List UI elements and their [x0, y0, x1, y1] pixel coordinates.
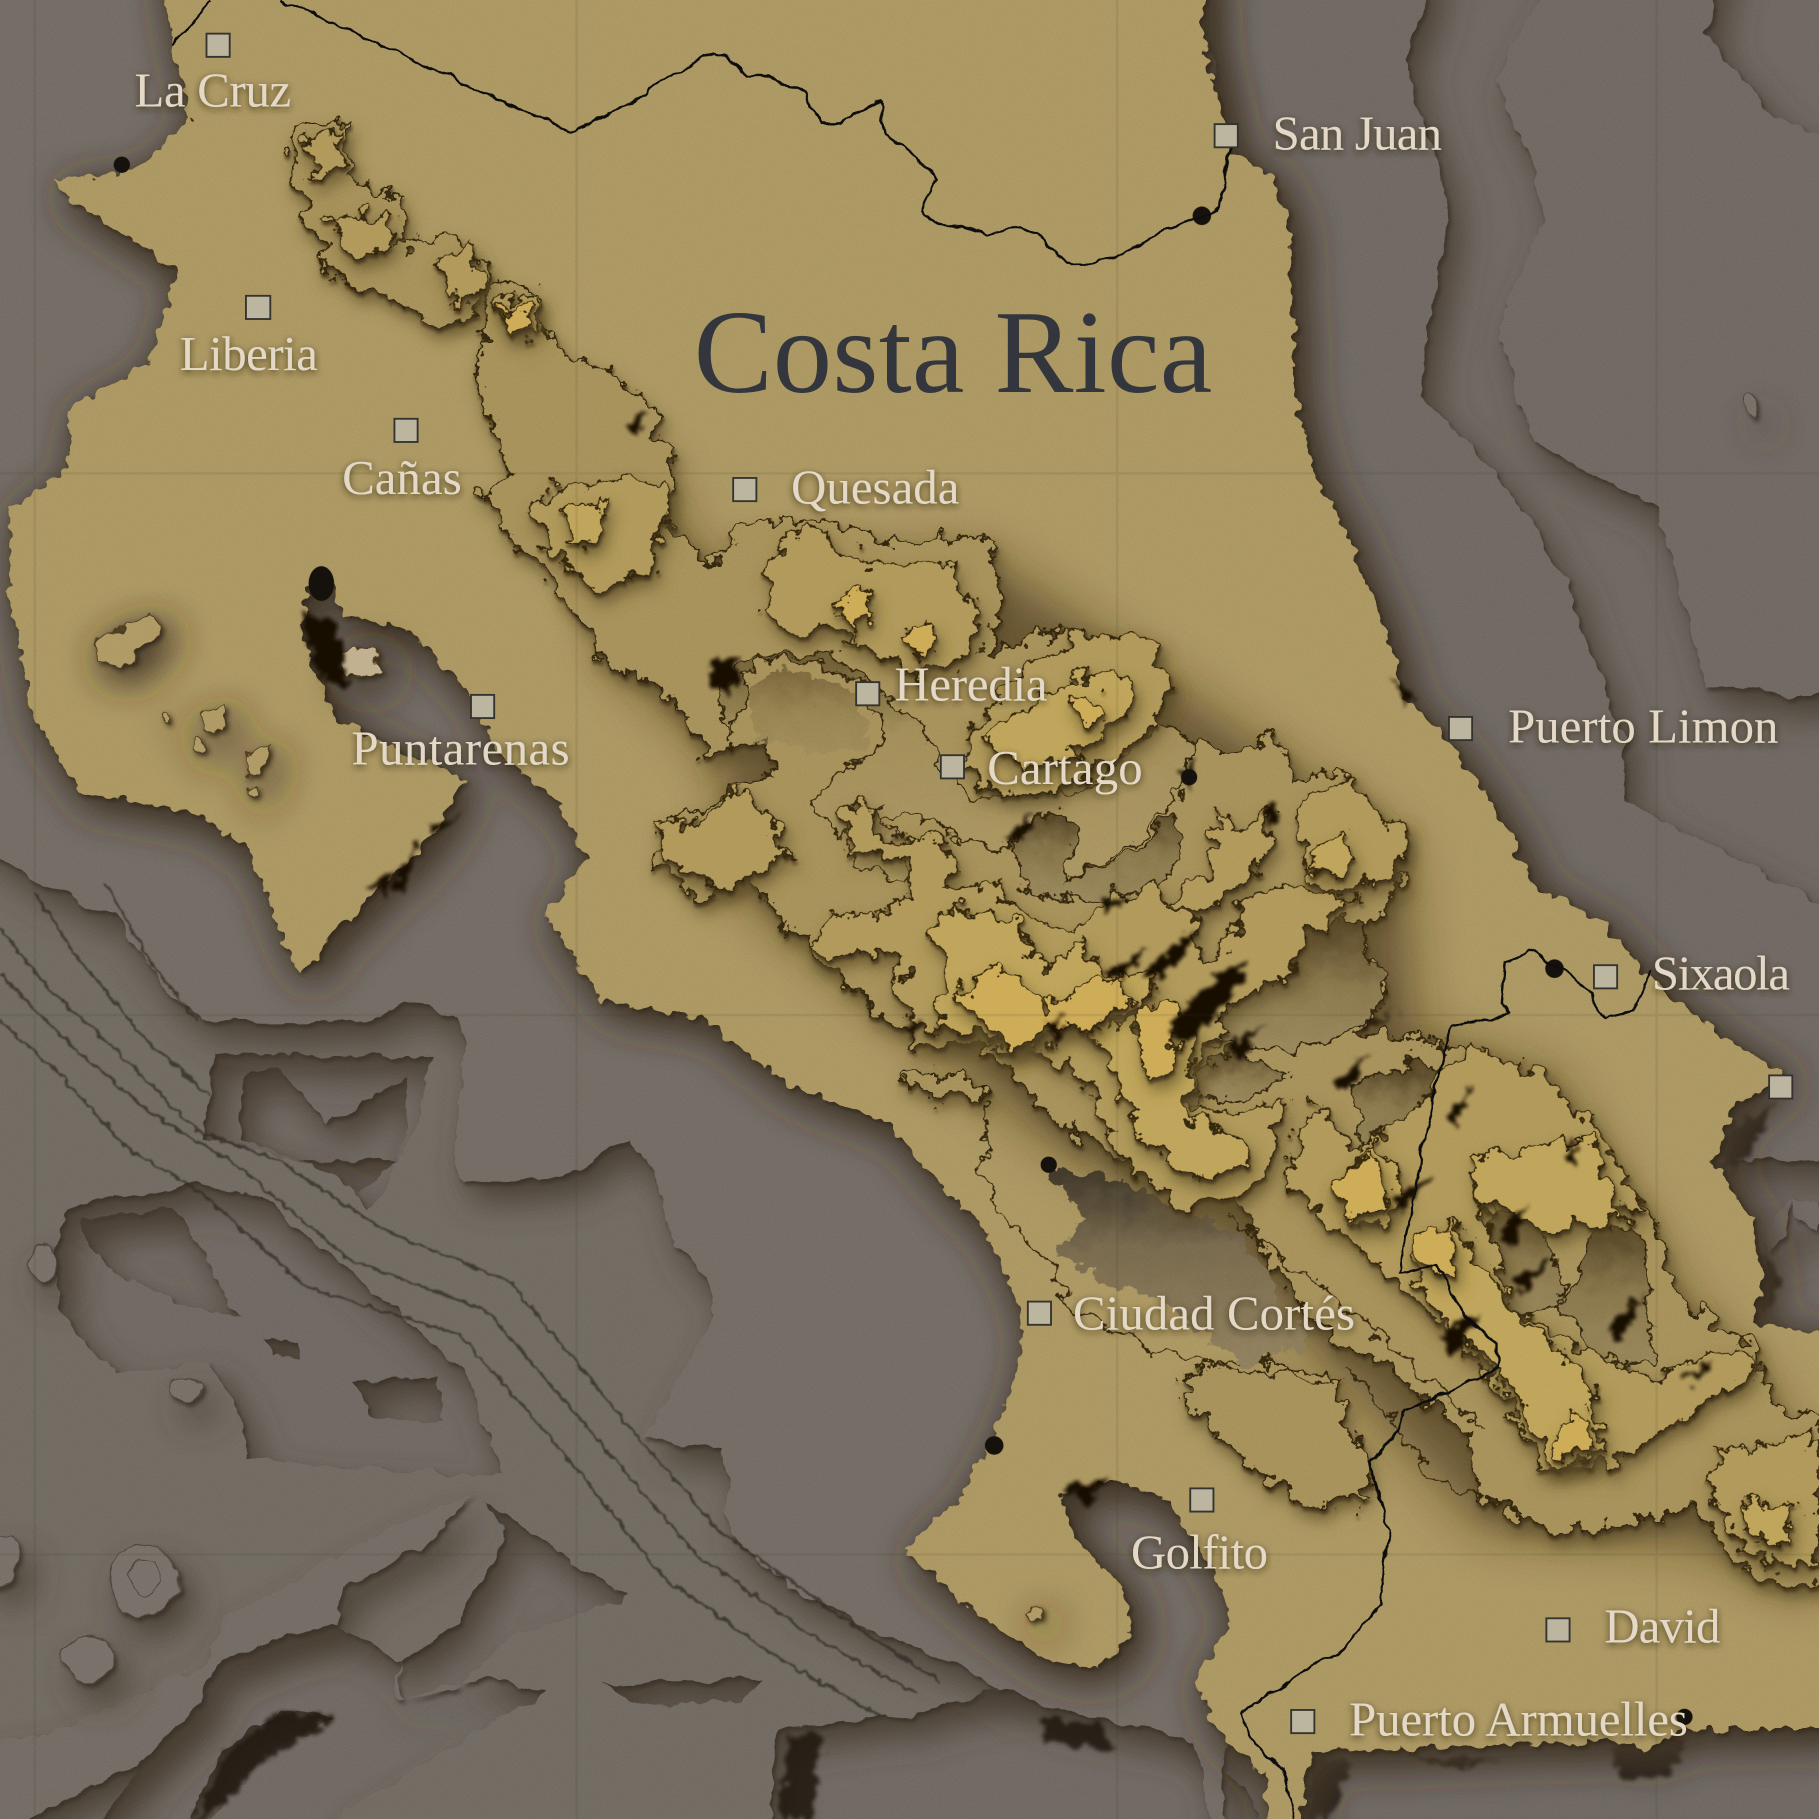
contour level 3: high ridges	[568, 499, 1792, 1549]
border: Panama	[1241, 949, 1652, 1819]
city: Ciudad Cortés: Ciudad Cortés	[1073, 1286, 1355, 1340]
deep ocean terraces: south west pits	[0, 812, 1276, 1819]
city: Quesada: Quesada	[791, 460, 959, 514]
islands	[95, 615, 1044, 1622]
contour level 1: low mountain ranges	[290, 122, 1819, 1589]
seamounts	[0, 396, 1760, 1681]
soft massif shadow	[603, 452, 1819, 1601]
city: San Juan: San Juan	[1273, 107, 1442, 161]
city: Golfito	[1131, 1488, 1268, 1579]
contour level 4: summits	[501, 302, 1595, 1456]
dark ravines	[304, 408, 1712, 1503]
city: David	[1546, 1600, 1720, 1654]
city: La Cruz: La Cruz	[135, 64, 291, 118]
city: Heredia: Heredia	[894, 658, 1048, 712]
city: Puntarenas	[352, 695, 570, 775]
city: Cartago: Cartago	[987, 741, 1143, 795]
submarine contour lines	[0, 882, 940, 1717]
city: Cañas: Cañas	[342, 451, 462, 505]
bay off Bocas del Toro	[1763, 1195, 1819, 1253]
city: Golfito: Golfito	[1131, 1525, 1268, 1579]
city: Puerto Limon: Puerto Limon	[1508, 699, 1778, 753]
city: Liberia	[180, 296, 318, 381]
shallow plateaus	[0, 0, 1276, 1819]
border: Nicaragua	[174, 0, 1235, 268]
city: Liberia: Liberia	[180, 327, 318, 381]
city: Sixaola: Sixaola	[1652, 947, 1790, 1001]
city: Puerto Armuelles: Puerto Armuelles	[1349, 1692, 1688, 1746]
coastal black pools	[114, 157, 1693, 1725]
secondary contour: southern slope	[984, 1102, 1485, 1496]
dark basins at the bottom edge	[195, 1102, 1781, 1819]
title: Costa Rica	[694, 287, 1212, 418]
lowland valleys within the massif	[722, 655, 1653, 1369]
deep ocean terraces: east	[0, 0, 1819, 1160]
city: Cañas	[342, 419, 462, 505]
city: David: David	[1604, 1600, 1720, 1654]
contour level 2: central and talamanca ridges	[307, 130, 1819, 1566]
city: La Cruz	[135, 34, 291, 118]
city: Puntarenas: Puntarenas	[352, 721, 570, 775]
city marker: unlabeled	[1769, 1075, 1792, 1099]
